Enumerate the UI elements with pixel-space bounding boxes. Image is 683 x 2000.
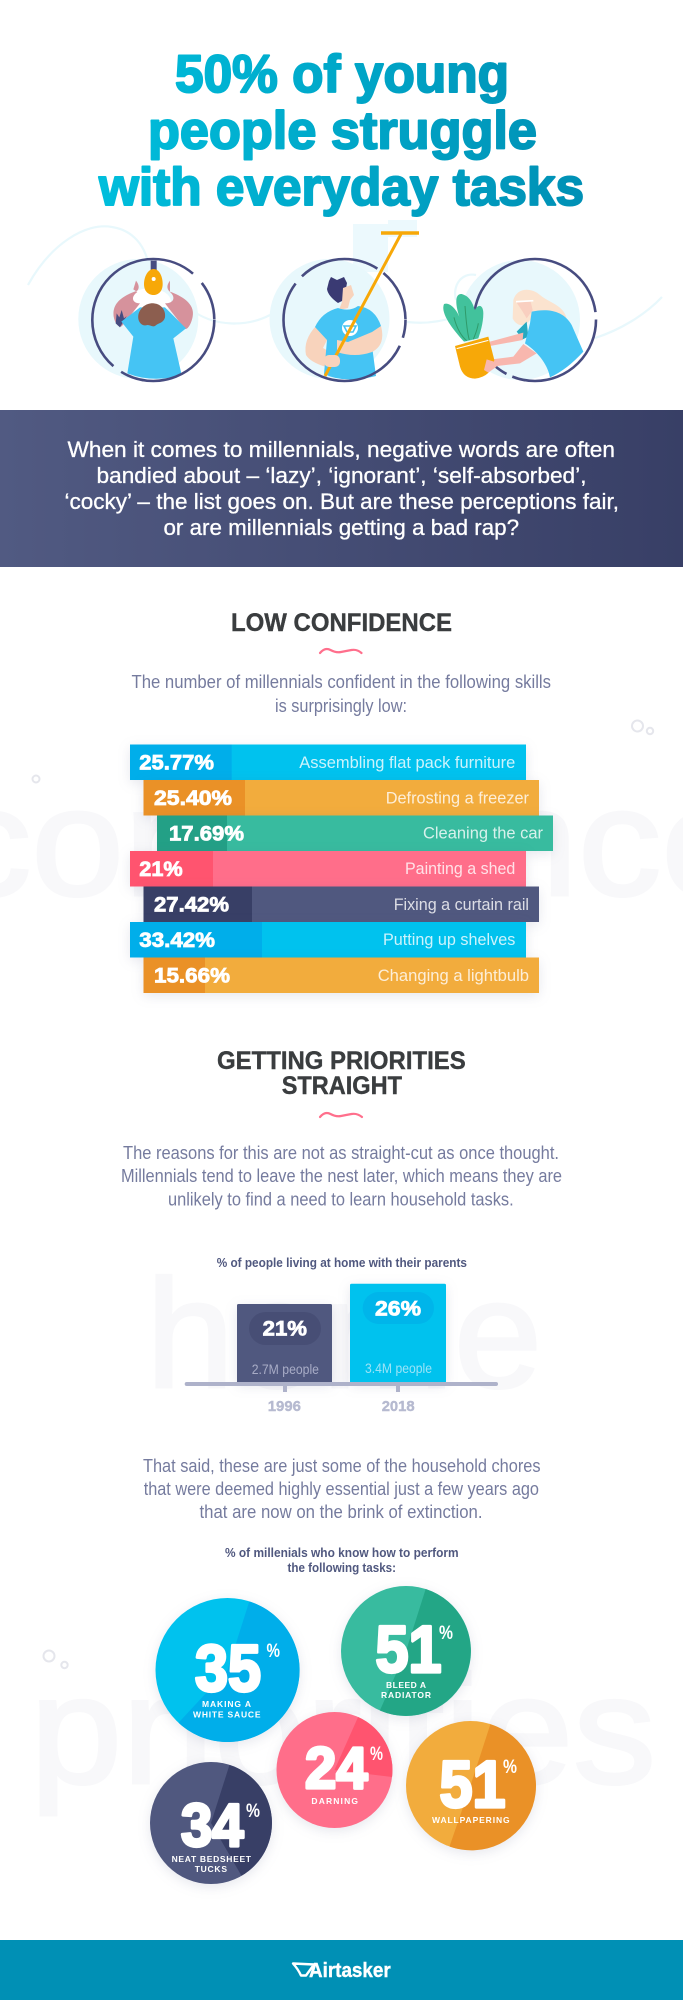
pie: making a white sauce: WHITE SAUCE	[193, 1710, 261, 1720]
bar: assembling flat pack furniture	[130, 744, 526, 780]
pie: bleed a radiator: RADIATOR	[381, 1690, 431, 1700]
subtitle: millennial tasks: % of millenials who know how to perform	[225, 1545, 459, 1560]
illustration: person cleaning with a squeegee	[270, 233, 419, 381]
pie: bleed a radiator: 51	[376, 1612, 442, 1686]
subtitle: millennial tasks: the following tasks:	[288, 1560, 396, 1575]
chart axis: 2018	[382, 1398, 415, 1415]
decorative bubbles	[32, 720, 653, 1668]
text: low confidence intro: The number of millennials confident in the following skills	[132, 672, 551, 692]
bar: painting a shed: 21%	[139, 858, 183, 881]
pie: wallpapering: WALLPAPERING	[432, 1815, 510, 1825]
decorative swirl behind illustrations	[28, 220, 662, 338]
background word: priorities: priorities	[30, 1644, 656, 1816]
title	[98, 45, 584, 217]
bar: fixing a curtain rail: Fixing a curtain rail	[394, 895, 529, 914]
bar: cleaning the car	[157, 816, 553, 851]
pie: wallpapering: 51	[440, 1747, 506, 1821]
pie: bleed a radiator: %	[439, 1623, 453, 1644]
bar: cleaning the car: 17.69%	[169, 822, 244, 846]
text: household chores	[143, 1456, 540, 1522]
heading: getting priorities straight	[217, 1047, 466, 1117]
bar: cleaning the car: Cleaning the car	[423, 824, 543, 842]
bar: assembling flat pack furniture: 25.77%	[139, 752, 214, 774]
pie: bleed a radiator: BLEED A	[386, 1680, 426, 1690]
bar: 1996	[237, 1304, 332, 1383]
chart: people living at home with their parents	[185, 1255, 498, 1415]
intro banner: When it comes to millennials, negative words are often	[68, 437, 615, 462]
heading: low confidence	[231, 609, 452, 653]
pie: neat bedsheet tucks: TUCKS	[195, 1864, 227, 1874]
pie: neat bedsheet tucks: 34	[181, 1792, 244, 1859]
bar: 1996: 2.7M people	[252, 1362, 319, 1377]
pie: bleed a radiator	[341, 1586, 471, 1716]
pie: making a white sauce	[156, 1598, 300, 1742]
pie: neat bedsheet tucks	[150, 1762, 272, 1884]
bar: defrosting a freezer: 25.40%	[154, 787, 232, 810]
bar: putting up shelves	[130, 922, 526, 958]
pie: darning: %	[370, 1744, 383, 1765]
background word: home: home	[146, 1248, 542, 1420]
intro banner: or are millennials getting a bad rap?	[164, 515, 519, 540]
heading: low confidence: LOW CONFIDENCE	[231, 609, 452, 637]
intro banner	[0, 410, 683, 567]
bar: 1996: 21%	[263, 1318, 307, 1340]
title: 50% of young	[175, 45, 509, 104]
text: low confidence intro: is surprisingly low:	[275, 696, 407, 716]
bar: painting a shed: Painting a shed	[405, 859, 515, 878]
bar chart: skills confidence	[130, 744, 553, 993]
text: household chores: that are now on the brink of extinction.	[200, 1502, 482, 1522]
bar: assembling flat pack furniture: Assembling flat pack furniture	[299, 753, 515, 772]
bar: fixing a curtain rail: 27.42%	[154, 894, 229, 916]
chart axis	[185, 1382, 498, 1415]
title: with everyday tasks	[98, 158, 584, 217]
text: household chores: That said, these are just some of the household chores	[143, 1456, 540, 1476]
bar: 2018: 26%	[375, 1298, 421, 1320]
pie: neat bedsheet tucks: NEAT BEDSHEET	[172, 1854, 252, 1864]
text: priorities intro: The reasons for this are not as straight-cut as once thought.	[123, 1143, 559, 1163]
bar: putting up shelves: 33.42%	[139, 929, 215, 952]
pie: neat bedsheet tucks: %	[246, 1801, 260, 1822]
bar: putting up shelves: Putting up shelves	[383, 930, 515, 949]
footer with Airtasker logo	[0, 1940, 683, 2000]
subtitle: millennial tasks	[225, 1545, 459, 1575]
bar: changing a lightbulb	[144, 958, 539, 993]
illustration: person changing a lightbulb	[78, 259, 214, 381]
bar: defrosting a freezer: Defrosting a freezer	[386, 788, 529, 808]
intro banner: bandied about – ‘lazy’, ‘ignorant’, ‘self-absorbed’,	[96, 463, 586, 488]
title: people struggle	[148, 102, 537, 160]
text: household chores: that were deemed highly essential just a few years ago	[144, 1479, 539, 1499]
bar: 2018	[350, 1284, 446, 1383]
text: priorities intro: unlikely to find a need to learn household tasks.	[168, 1190, 514, 1210]
bar: painting a shed	[130, 851, 526, 886]
illustration: person carrying a potted plant	[443, 259, 596, 381]
chart title: % of people living at home with their parents	[217, 1255, 467, 1270]
chart axis: 1996	[268, 1398, 301, 1415]
heading: getting priorities straight: STRAIGHT	[282, 1072, 402, 1100]
pie: wallpapering: %	[503, 1757, 517, 1778]
pie: darning	[276, 1712, 392, 1828]
heading: getting priorities straight: GETTING PRIORITIES	[217, 1047, 466, 1075]
text: priorities intro	[121, 1143, 562, 1210]
bar: changing a lightbulb: 15.66%	[154, 964, 230, 988]
logo wordmark: Airtasker	[309, 1960, 391, 1982]
bar: fixing a curtain rail	[144, 886, 539, 922]
text: priorities intro: Millennials tend to leave the nest later, which means they are	[121, 1166, 562, 1186]
pie: darning: 24	[305, 1736, 368, 1801]
pie: making a white sauce: 35	[195, 1631, 261, 1705]
bar: changing a lightbulb: Changing a lightbulb	[378, 966, 529, 985]
text: low confidence intro	[132, 672, 551, 716]
pie: making a white sauce: %	[266, 1641, 280, 1662]
bar: 2018: 3.4M people	[365, 1361, 432, 1376]
pie: wallpapering	[406, 1721, 536, 1850]
pie: making a white sauce: MAKING A	[202, 1699, 251, 1709]
pie: darning: DARNING	[311, 1796, 358, 1806]
bar: defrosting a freezer	[144, 780, 539, 816]
icon: Airtasker wing	[293, 1964, 314, 1976]
intro banner: ‘cocky’ – the list goes on. But are these perceptions fair,	[64, 489, 619, 514]
